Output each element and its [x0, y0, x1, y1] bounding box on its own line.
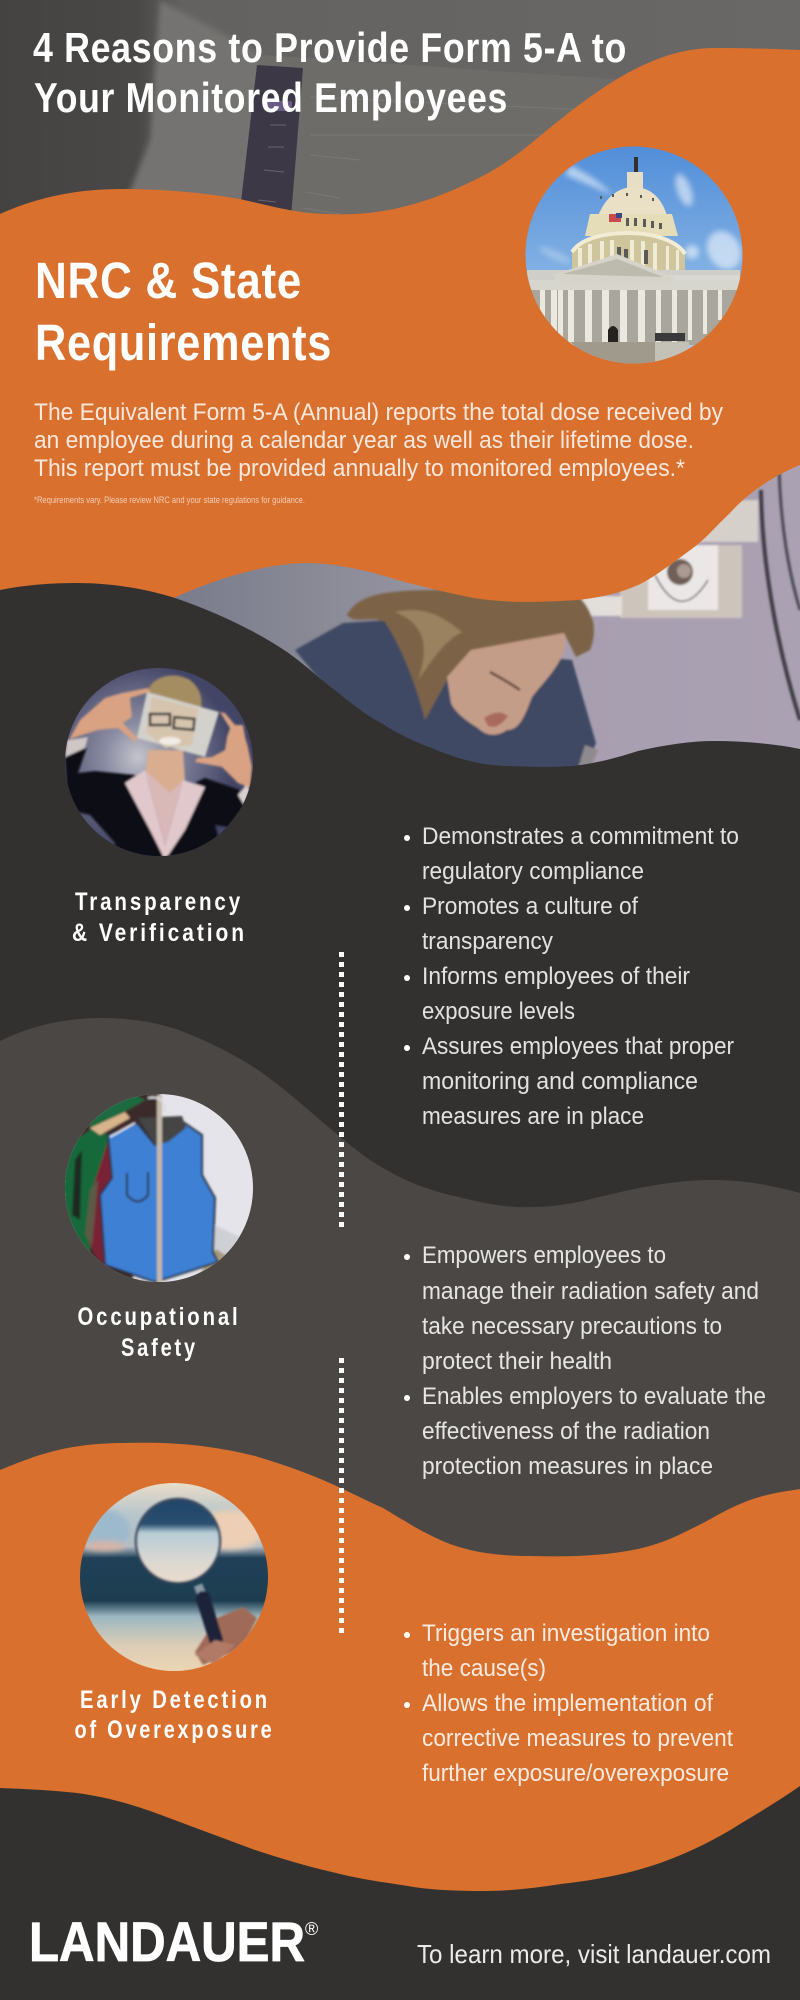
text block: Form 5-A description: an employee during a calendar year as well as their lifetime dose.: [34, 427, 694, 454]
heading: NRC & State Requirements: [35, 252, 332, 371]
logo: LANDAUER: LANDAUER: [29, 1910, 305, 1973]
panel: occupational safety grey wave: [0, 1018, 800, 1600]
heading: Transparency & Verification: Transparency: [75, 888, 243, 916]
text block: transparency bullet list: Assures employees that proper: [422, 1033, 734, 1060]
text block: transparency bullet list: regulatory compliance: [422, 858, 644, 885]
photo: technician at x-ray machine: [0, 460, 800, 800]
heading: Early Detection of Overexposure: Early Detection: [80, 1686, 270, 1714]
footnote: *Requirements vary. Please review NRC and your state regulations for guidance.: [34, 495, 305, 505]
photo: woman holding transparent face card: [65, 668, 253, 856]
text block: transparency bullet list: transparency: [422, 928, 553, 955]
text block: occupational safety bullet list: Empowers employees to: [422, 1242, 666, 1269]
panel: transparency dark wave: [0, 583, 800, 2000]
heading: Occupational Safety: [78, 1303, 240, 1362]
heading: NRC & State Requirements: Requirements: [35, 314, 332, 371]
text block: transparency bullet list: Demonstrates a commitment to: [422, 823, 739, 850]
text block: early detection bullet list: corrective measures to prevent: [422, 1725, 733, 1752]
text block: early detection bullet list: Allows the implementation of: [422, 1690, 713, 1717]
text block: Form 5-A description: The Equivalent Form 5-A (Annual) reports the total dose received by: [34, 399, 723, 426]
text block: transparency bullet list: Promotes a culture of: [422, 893, 638, 920]
text block: occupational safety bullet list: effectiveness of the radiation: [422, 1418, 710, 1445]
text block: Form 5-A description: [34, 399, 723, 482]
title: 4 Reasons to Provide Form 5-A to: [33, 24, 627, 71]
text block: transparency bullet list: exposure levels: [422, 998, 575, 1025]
title: Your Monitored Employees: [34, 74, 508, 121]
photo: US Capitol in circle: [526, 146, 742, 364]
text block: transparency bullet list: measures are in place: [422, 1103, 644, 1130]
text block: occupational safety bullet list: take necessary precautions to: [422, 1313, 722, 1340]
text block: occupational safety bullet list: manage their radiation safety and: [422, 1278, 759, 1305]
title: [33, 24, 627, 121]
panel: early detection orange wave: [0, 1443, 800, 1891]
heading: Transparency & Verification: & Verification: [72, 919, 247, 947]
heading: Transparency & Verification: [72, 888, 247, 947]
dotted connector 2: [339, 1358, 344, 1633]
text block: early detection bullet list: the cause(s): [422, 1655, 546, 1682]
photo: blue lead apron on rack: [65, 1094, 253, 1282]
text block: occupational safety bullet list: [404, 1242, 766, 1480]
text block: early detection bullet list: Triggers an investigation into: [422, 1620, 710, 1647]
text block: occupational safety bullet list: protect their health: [422, 1348, 612, 1375]
dotted connector 1: [339, 952, 344, 1227]
heading: Occupational Safety: Occupational: [78, 1303, 240, 1331]
heading: Early Detection of Overexposure: [74, 1686, 274, 1744]
photo: software dashboard on monitor: [0, 0, 800, 300]
text block: occupational safety bullet list: Enables employers to evaluate the: [422, 1383, 766, 1410]
text block: Form 5-A description: This report must be provided annually to monitored employees.*: [34, 455, 685, 482]
text block: transparency bullet list: [404, 823, 739, 1130]
heading: NRC & State Requirements: NRC & State: [35, 252, 302, 309]
text block: early detection bullet list: further exposure/overexposure: [422, 1760, 729, 1787]
call to action: visit landauer.com: To learn more, visit landauer.com: [417, 1939, 771, 1969]
text block: early detection bullet list: [404, 1620, 733, 1787]
panel: NRC orange wave: [0, 48, 800, 640]
logo: LANDAUER: ®: [305, 1919, 318, 1939]
heading: Early Detection of Overexposure: of Overexposure: [74, 1716, 274, 1744]
text block: transparency bullet list: monitoring and compliance: [422, 1068, 698, 1095]
heading: Occupational Safety: Safety: [121, 1334, 198, 1362]
text block: transparency bullet list: Informs employees of their: [422, 963, 690, 990]
photo: magnifying glass: [80, 1483, 268, 1671]
text block: occupational safety bullet list: protection measures in place: [422, 1453, 713, 1480]
